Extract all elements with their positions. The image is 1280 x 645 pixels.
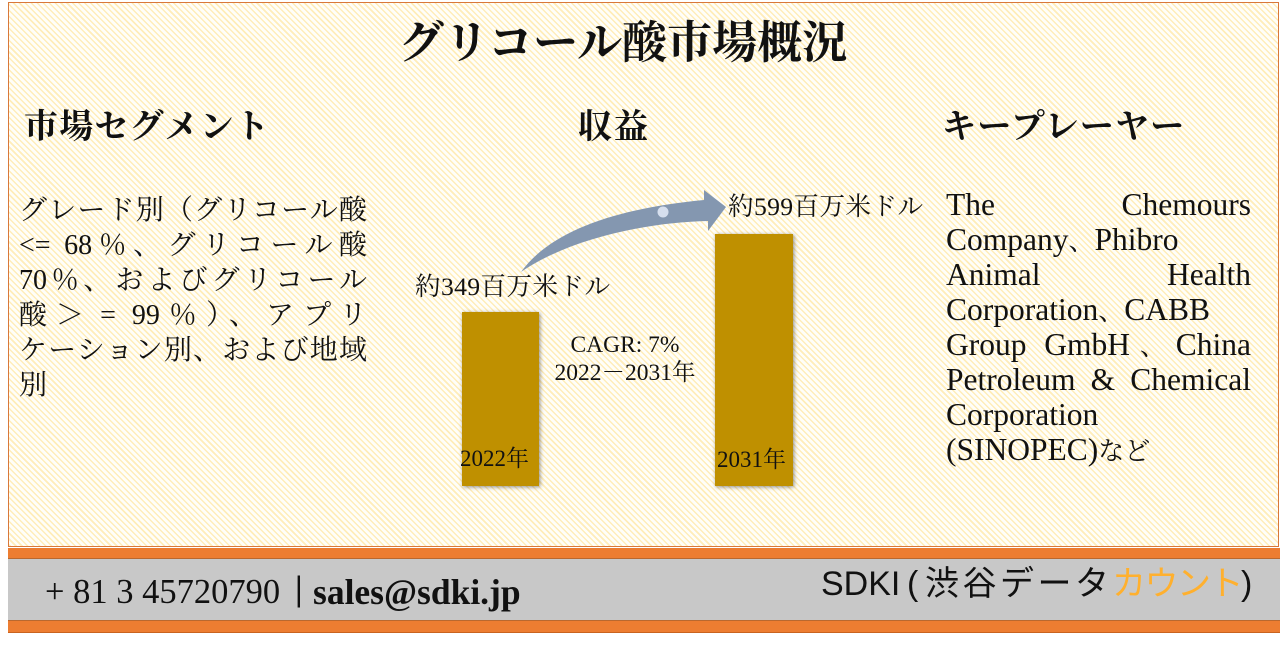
footer brand: 渋谷データ bbox=[925, 565, 1112, 603]
text block: segments list: ケーション別、および地域 bbox=[19, 335, 367, 366]
footer brand bbox=[821, 565, 1252, 603]
bar: 2031 bbox=[715, 234, 793, 486]
text block: key players list: Petroleum & Chemical bbox=[946, 362, 1251, 397]
title: グリコール酸市場概況 bbox=[399, 18, 847, 68]
label: year 2031: 2031年 bbox=[717, 447, 786, 472]
label: CAGR: CAGR: 7% bbox=[570, 332, 680, 358]
text block: segments list: 70％、およびグリコール bbox=[19, 265, 367, 296]
label: year 2022: 2022年 bbox=[460, 446, 529, 471]
text block: key players list: (SINOPEC)など bbox=[946, 432, 1150, 467]
arrow: growth bbox=[521, 190, 726, 272]
text block: segments list bbox=[19, 195, 367, 401]
text block: segments list: グレード別（グリコール酸 bbox=[19, 195, 367, 226]
footer contact: + 81 3 45720790 bbox=[45, 573, 280, 611]
text block: key players list: Animal Health bbox=[946, 257, 1251, 292]
text block: key players list: Corporation bbox=[946, 397, 1098, 432]
chart: revenue bars bbox=[415, 190, 923, 490]
text block: segments list: <= 68％、グリコール酸 bbox=[19, 230, 367, 261]
footer brand: ( bbox=[907, 565, 918, 603]
text block: key players list: Corporation、CABB bbox=[946, 292, 1210, 327]
label: CAGR bbox=[554, 332, 696, 386]
heading: key players: キープレーヤー bbox=[942, 109, 1185, 146]
footer gray strip bbox=[8, 558, 1280, 621]
bar: 2022 bbox=[462, 312, 539, 486]
footer brand: カウント bbox=[1112, 565, 1242, 603]
footer brand: ) bbox=[1241, 565, 1252, 603]
text block: key players list bbox=[946, 187, 1251, 467]
label: CAGR: 2022－2031年 bbox=[554, 360, 696, 386]
label: 2022 value: 約349百万米ドル bbox=[415, 272, 610, 301]
label: 2031 value: 約599百万米ドル bbox=[728, 192, 923, 221]
footer contact: | bbox=[295, 570, 303, 608]
text block: key players list: Company、Phibro bbox=[946, 222, 1179, 257]
text block: key players list: The Chemours bbox=[946, 187, 1251, 222]
heading: market segments: 市場セグメント bbox=[24, 109, 270, 146]
text block: segments list: 別 bbox=[19, 370, 47, 401]
footer band bbox=[8, 548, 1280, 633]
footer contact: sales@sdki.jp bbox=[313, 572, 521, 612]
text block: key players list: Group GmbH、China bbox=[946, 327, 1251, 362]
heading: revenue: 収益 bbox=[578, 109, 650, 146]
footer brand: SDKI bbox=[821, 565, 900, 603]
footer contact bbox=[45, 570, 521, 612]
text block: segments list: 酸＞ = 99％）、アプリ bbox=[19, 300, 367, 331]
